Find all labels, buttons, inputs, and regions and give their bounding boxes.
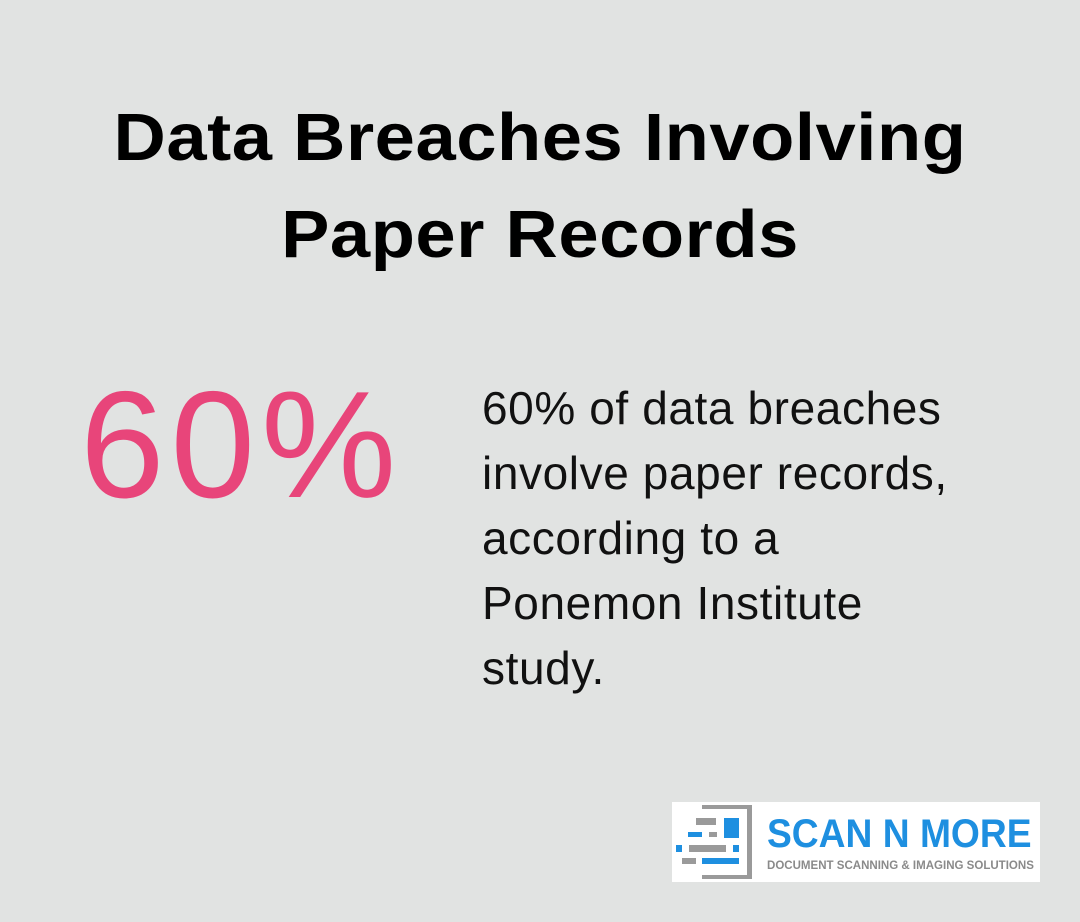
description text: according to a [482,512,779,564]
title [114,100,966,272]
description text: Ponemon Institute [482,577,863,629]
icon: scanner blocks [676,805,752,879]
description text [482,382,948,694]
logo: Scan N More [672,802,1040,882]
logo wordmark: SCAN N MORE [767,812,1032,856]
big stat 60%: 60% [80,360,402,530]
logo tagline: DOCUMENT SCANNING & IMAGING SOLUTIONS [767,858,1034,872]
title: Data Breaches Involving [114,100,966,175]
title: Paper Records [281,197,799,272]
description text: study. [482,642,605,694]
description text: 60% of data breaches [482,382,942,434]
description text: involve paper records, [482,447,948,499]
